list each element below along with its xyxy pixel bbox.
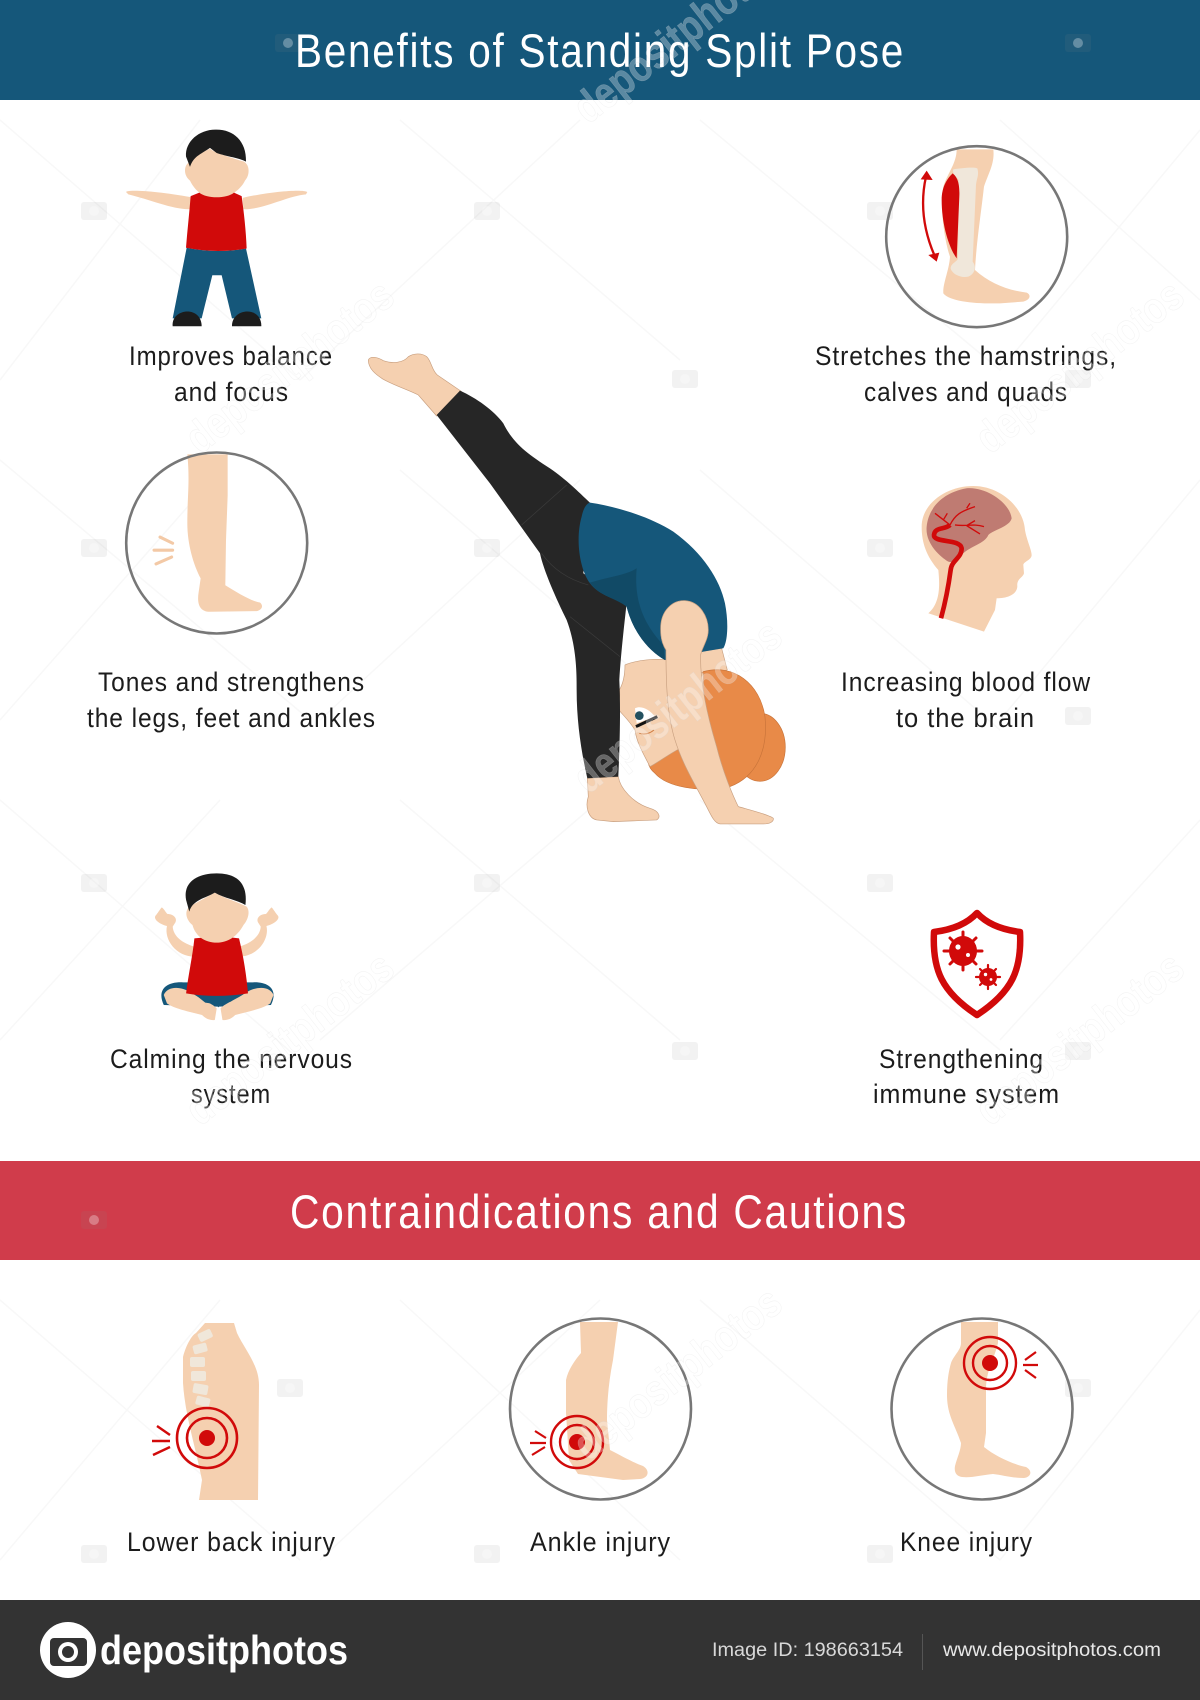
header banner: contraindications <box>0 1161 1200 1260</box>
icon: lower back with pain target <box>152 1323 259 1500</box>
icon: standing child with outstretched arms <box>126 130 307 326</box>
circle outline: leg <box>126 452 307 634</box>
label: improves balance: and focus <box>174 377 289 407</box>
arm and hand <box>661 601 773 824</box>
title: Benefits of Standing Split Pose <box>295 24 905 77</box>
top shadow <box>590 568 665 660</box>
header banner: benefits <box>0 0 1200 100</box>
label: stretches the hamstrings: Stretches the hamstrings, <box>815 341 1117 371</box>
label: knee injury: Knee injury <box>900 1527 1033 1557</box>
footer bar <box>0 1600 1200 1700</box>
label: increasing blood flow: Increasing blood flow <box>841 667 1091 697</box>
footer logo text: depositphotos <box>100 1627 348 1673</box>
icon: ankle with pain target in circle <box>510 1318 691 1500</box>
leggings <box>437 391 627 778</box>
hair <box>648 670 766 789</box>
label: tones and strengthens: Tones and strengthens <box>98 667 365 697</box>
image id: Image ID: 198663154 <box>712 1640 903 1661</box>
circle outline: calf <box>886 146 1067 327</box>
central figure: standing split pose <box>368 354 785 824</box>
icon: calf muscle stretch <box>921 149 1030 303</box>
label: lower back injury: Lower back injury <box>127 1527 336 1557</box>
icon: knee with pain target in circle <box>892 1318 1072 1500</box>
label: increasing blood flow: to the brain <box>896 703 1035 733</box>
section heading: Contraindications and Cautions <box>290 1185 908 1238</box>
label: stretches the hamstrings: calves and quads <box>864 377 1068 407</box>
standing foot <box>587 777 659 822</box>
label: improves balance: Improves balance <box>129 341 333 371</box>
icon: leg in circle <box>154 454 262 612</box>
neck <box>700 648 727 677</box>
website: www.depositphotos.com <box>942 1640 1161 1661</box>
eye <box>635 707 657 734</box>
icon: shield with viruses <box>934 913 1020 1015</box>
small virus <box>976 965 1000 989</box>
label: calming the nervous system: Calming the nervous <box>110 1044 353 1074</box>
label: strengthening immune system: immune system <box>873 1079 1060 1109</box>
icon: head with brain and artery <box>922 486 1032 632</box>
face <box>617 659 703 767</box>
icon: seated meditating child <box>155 873 278 1020</box>
footer logo icon: camera <box>40 1622 96 1678</box>
label: calming the nervous system: system <box>191 1079 271 1109</box>
label: ankle injury: Ankle injury <box>530 1527 671 1557</box>
text: depositphotos <box>176 942 403 1135</box>
raised foot <box>368 354 462 416</box>
large virus <box>944 932 982 970</box>
text: depositphotos <box>564 610 791 803</box>
top <box>579 503 727 660</box>
bun <box>735 713 785 781</box>
label: strengthening immune system: Strengthening <box>879 1044 1044 1074</box>
label: tones and strengthens: the legs, feet and ankles <box>87 703 376 733</box>
text: depositphotos <box>564 1277 791 1470</box>
text: depositphotos <box>176 270 403 463</box>
